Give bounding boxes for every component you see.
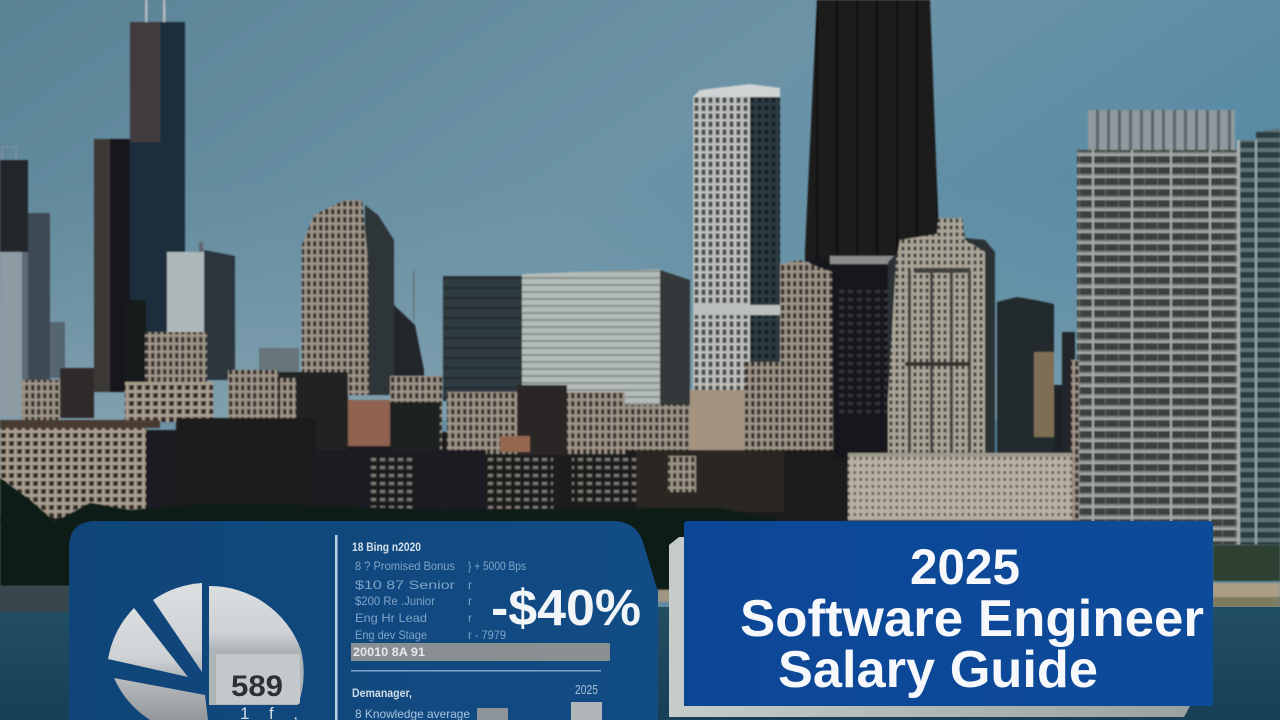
table rows [355, 559, 526, 642]
title text: Software Engineer [740, 590, 1204, 648]
large glass high-rise [1071, 110, 1280, 545]
small bar [571, 702, 602, 720]
grey frame [669, 537, 1190, 717]
lower table heading: Demanager, [352, 686, 412, 700]
tall dark tower with antennas [94, 0, 185, 392]
far-left tower cluster [0, 147, 65, 417]
summary bar [351, 643, 610, 661]
panel background [69, 521, 658, 720]
blue title plate [684, 521, 1213, 706]
lake water [0, 607, 1280, 720]
table heading: 18 Bing n2020 [352, 540, 421, 554]
title text: 2025 [910, 539, 1020, 595]
pie value box: 589 [231, 670, 283, 703]
table rows: $200 Re .Junior [355, 594, 435, 608]
vertical divider [335, 535, 338, 720]
white grid tower [693, 84, 780, 395]
panel: title [669, 521, 1213, 717]
shoreline sand and trees [0, 478, 1280, 614]
title text: Salary Guide [778, 641, 1098, 699]
table rows: } + 5000 Bps [468, 559, 526, 573]
table text [352, 540, 526, 642]
table rows: Eng dev Stage [355, 628, 427, 642]
table rows: r [468, 594, 472, 608]
table rows: r [468, 611, 472, 625]
table rows: 8 ? Promised Bonus [355, 559, 455, 573]
lower row blocks [0, 418, 1072, 520]
pale and dark mid-rise tower [167, 242, 235, 382]
percentage callout: -$40% [491, 579, 641, 636]
ornate stone tower [888, 218, 995, 455]
table rows: Eng Hr Lead [355, 611, 427, 625]
dark fill behind lower rows [0, 432, 1085, 522]
pie chart [108, 583, 304, 720]
ornate tan high-rise [259, 200, 424, 395]
city skyline photo [0, 0, 1280, 545]
sky background [0, 0, 1280, 520]
striped office block [443, 269, 690, 410]
summary bar: 20010 8A 91 [353, 645, 425, 659]
mid row residential blocks [22, 332, 780, 457]
table rows: $10 87 Senior [355, 578, 455, 592]
year label: 2025 [575, 682, 598, 697]
black tapered tower [805, 0, 940, 458]
pie value box [216, 654, 300, 720]
small chip [477, 708, 508, 720]
thin rule [351, 670, 601, 672]
panel: salary data [69, 521, 658, 720]
table rows: r [468, 578, 472, 592]
table rows: r - 7979 [468, 628, 506, 642]
dark far-right buildings [997, 297, 1075, 455]
tan tower left of black tower [780, 260, 833, 450]
pier left of data panel [0, 586, 70, 612]
title text [740, 539, 1204, 699]
